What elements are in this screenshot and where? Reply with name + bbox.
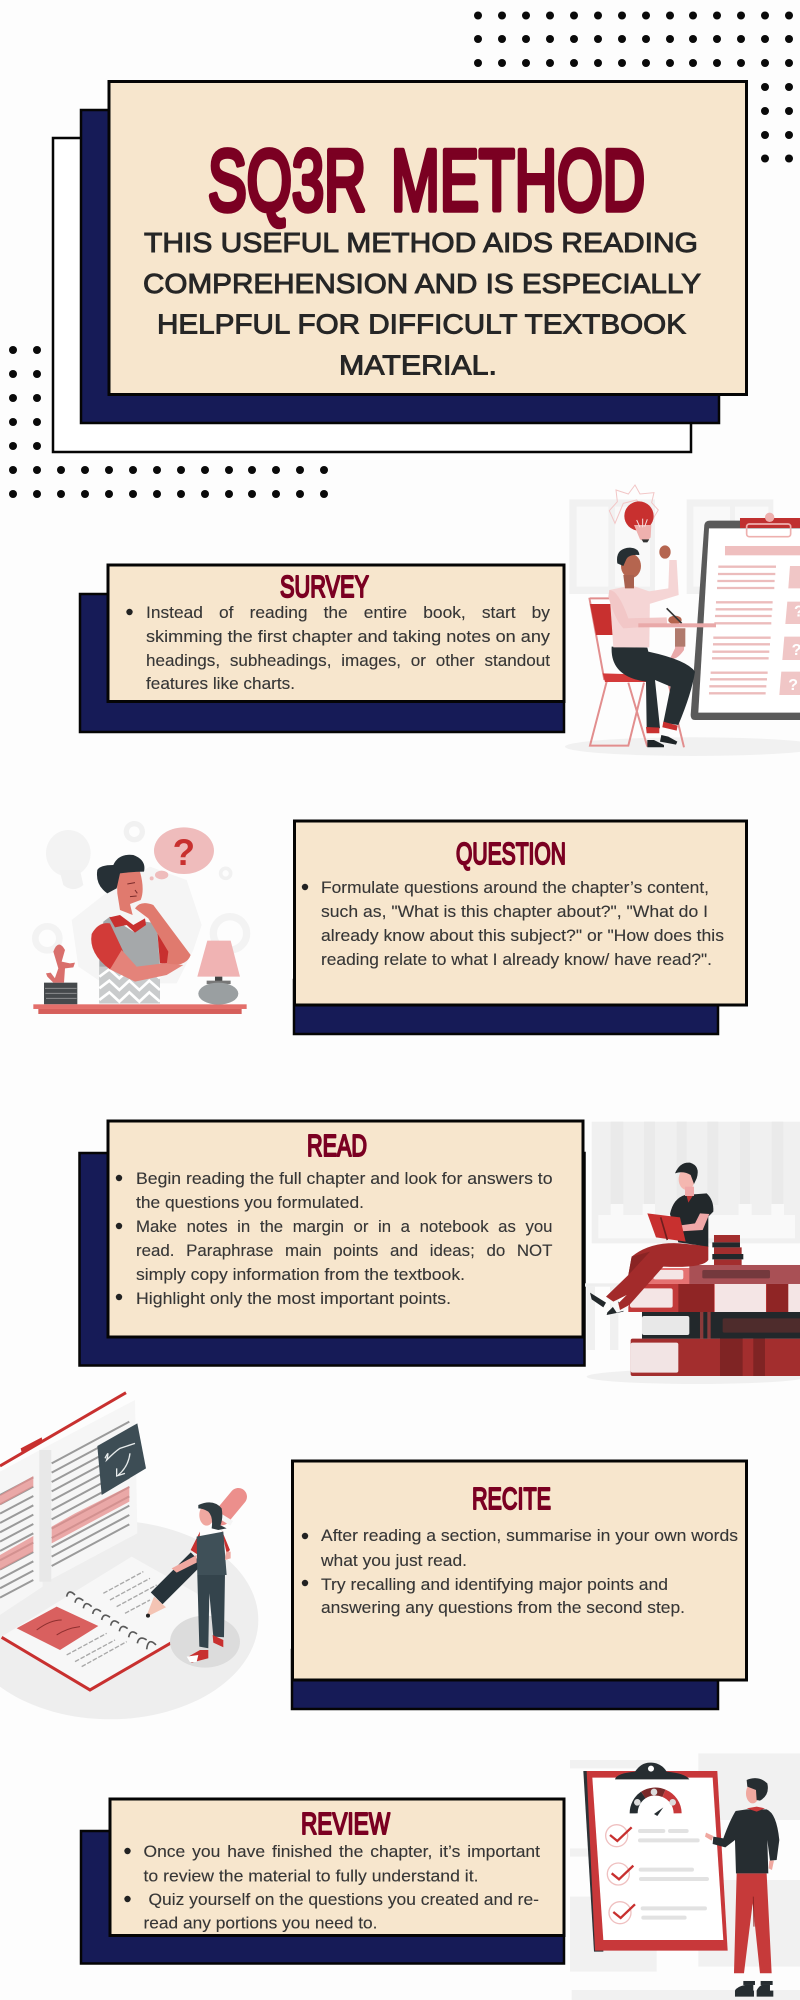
review text bbox=[124, 1842, 540, 1932]
cream title card bbox=[109, 82, 746, 394]
navy backing bbox=[80, 1153, 584, 1366]
cream card bbox=[110, 1799, 564, 1936]
panel: recite bbox=[292, 1461, 746, 1709]
recite text bbox=[302, 1526, 738, 1617]
survey text: Instead of reading the entire book, start by bbox=[146, 603, 551, 622]
panel: survey bbox=[80, 565, 564, 732]
review text: Quiz yourself on the questions you created and re- bbox=[148, 1890, 539, 1909]
panel: read bbox=[80, 1121, 584, 1366]
illustration: thinking man at desk bbox=[33, 824, 247, 1014]
heading: read: READ bbox=[307, 1128, 367, 1163]
title: SQ3R bbox=[208, 133, 366, 229]
navy backing bbox=[81, 1831, 564, 1964]
subtitle: THIS USEFUL METHOD AIDS READING bbox=[144, 227, 698, 258]
panel: question bbox=[294, 821, 746, 1034]
cream card bbox=[108, 565, 564, 702]
cream card bbox=[108, 1121, 583, 1337]
read text: Begin reading the full chapter and look for answers to bbox=[136, 1169, 552, 1188]
illustration: thinking man at desk: ? bbox=[173, 832, 195, 873]
read text: read. Paraphrase main points and ideas; do NOT bbox=[136, 1241, 552, 1260]
heading: review: REVIEW bbox=[301, 1806, 391, 1841]
navy backing bbox=[292, 1650, 718, 1709]
read text: Highlight only the most important points. bbox=[136, 1289, 451, 1308]
subtitle: HELPFUL FOR DIFFICULT TEXTBOOK bbox=[157, 308, 686, 340]
question text: Formulate questions around the chapter’s content, bbox=[321, 878, 709, 897]
title: METHOD bbox=[391, 133, 645, 229]
question text: such as, "What is this chapter about?", "What do I bbox=[321, 902, 708, 921]
question text: already know about this subject?" or "How does this bbox=[321, 926, 724, 945]
title bbox=[208, 133, 645, 229]
illustration: man with checklist clipboard bbox=[570, 1753, 800, 2000]
review text: read any portions you need to. bbox=[144, 1914, 378, 1932]
subtitle: COMPREHENSION AND IS ESPECIALLY bbox=[143, 268, 701, 299]
survey text: skimming the first chapter and taking notes on any bbox=[146, 627, 551, 646]
read text: Make notes in the margin or in a notebook as you bbox=[136, 1217, 552, 1236]
recite text: answering any questions from the second step. bbox=[321, 1598, 685, 1617]
navy backing panel bbox=[81, 110, 719, 423]
illustration: man at clipboard with lightbulb bbox=[565, 485, 800, 756]
recite text: Try recalling and identifying major points and bbox=[321, 1575, 668, 1594]
question text: reading relate to what I already know/ have read?". bbox=[321, 950, 712, 969]
read text: simply copy information from the textbook. bbox=[136, 1265, 465, 1284]
subtitle bbox=[143, 227, 701, 380]
illustration: man at clipboard with lightbulb: ? bbox=[788, 677, 798, 694]
question text bbox=[302, 878, 724, 969]
recite text: After reading a section, summarise in your own words bbox=[321, 1526, 738, 1545]
survey text bbox=[126, 603, 551, 693]
panel: title block bbox=[53, 82, 746, 452]
survey text: features like charts. bbox=[146, 674, 295, 693]
heading: recite: RECITE bbox=[472, 1481, 551, 1516]
survey text: headings, subheadings, images, or other standout bbox=[146, 651, 550, 670]
read text: the questions you formulated. bbox=[136, 1193, 364, 1212]
read text bbox=[116, 1169, 553, 1308]
heading: question: QUESTION bbox=[456, 836, 566, 871]
navy backing bbox=[80, 594, 564, 732]
illustration: person writing in a giant notebook bbox=[0, 1393, 258, 1719]
review text: to review the material to fully understand it. bbox=[144, 1866, 478, 1886]
dot pattern: top right bbox=[474, 12, 793, 162]
illustration: man reading on a stack of books bbox=[585, 1122, 800, 1384]
heading: survey: SURVEY bbox=[280, 569, 369, 604]
cream card bbox=[294, 821, 746, 1005]
navy backing bbox=[294, 980, 718, 1034]
review text: Once you have finished the chapter, it’s important bbox=[144, 1842, 540, 1861]
panel: review bbox=[81, 1799, 564, 1964]
outline backing frame bbox=[53, 138, 691, 452]
recite text: what you just read. bbox=[320, 1551, 467, 1570]
cream card bbox=[292, 1461, 746, 1680]
dot pattern: bottom left bbox=[9, 346, 328, 498]
subtitle: MATERIAL. bbox=[339, 350, 497, 380]
